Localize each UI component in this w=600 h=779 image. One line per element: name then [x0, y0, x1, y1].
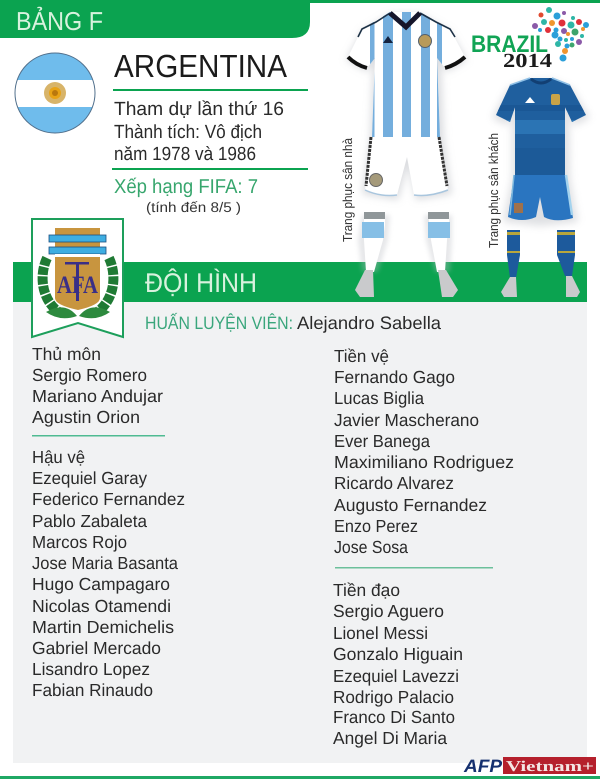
coach: HUẤN LUYỆN VIÊN:: [145, 312, 293, 333]
logo wordmark: BRAZIL: [471, 31, 548, 58]
squad list: midfielders: Maximiliano Rodriguez: [334, 452, 514, 472]
FIFA ranking: [114, 176, 258, 215]
squad list: forwards: Gonzalo Higuain: [333, 644, 463, 664]
icon: Argentina flag: [15, 53, 95, 134]
participation and achievements: Tham dự lần thứ 16: [114, 99, 284, 120]
squad list: midfielders: Augusto Fernandez: [334, 495, 487, 515]
squad list: midfielders: Lucas Biglia: [334, 388, 424, 408]
home shorts: [365, 137, 448, 195]
label: away kit: Trang phục sân khách: [486, 133, 501, 248]
squad list: midfielders: Jose Sosa: [334, 537, 408, 557]
away shirt: [490, 78, 590, 175]
FIFA ranking: Xếp hạng FIFA: 7: [114, 176, 258, 198]
squad list: forwards: Tiền đạo: [333, 580, 400, 600]
label: home kit: Trang phục sân nhà: [340, 137, 355, 242]
squad list: forwards: Franco Di Santo: [333, 707, 455, 727]
squad list: forwards: Lionel Messi: [333, 623, 428, 643]
squad list: forwards: Rodrigo Palacio: [333, 687, 454, 707]
squad heading: ĐỘI HÌNH: [145, 268, 257, 298]
squad list: defenders: [32, 447, 185, 700]
participation and achievements: [114, 99, 284, 165]
icon: AFA crest pennant: AFA: [57, 272, 98, 299]
squad list: defenders: Hậu vệ: [32, 447, 85, 467]
squad list: goalkeepers: Thủ môn: [32, 344, 101, 364]
country name: ARGENTINA: [114, 48, 288, 84]
squad list: defenders: Jose Maria Basanta: [32, 553, 178, 573]
logo year: 2014: [503, 50, 552, 72]
squad list: forwards: [333, 580, 463, 748]
squad list: defenders: Fabian Rinaudo: [32, 680, 153, 700]
squad list: defenders: Gabriel Mercado: [32, 638, 161, 658]
home socks and boots: [355, 211, 458, 297]
squad list: forwards: Angel Di Maria: [333, 728, 447, 748]
section band: squad: [13, 262, 587, 302]
squad list: midfielders: Javier Mascherano: [334, 410, 479, 430]
away shorts: [508, 175, 573, 220]
squad list: defenders: Federico Fernandez: [32, 489, 185, 509]
logo: Brazil 2014: [471, 7, 589, 72]
illustration: away kit: [490, 78, 590, 297]
AFP mark: AFP: [463, 756, 503, 776]
squad list: defenders: Nicolas Otamendi: [32, 596, 171, 616]
squad list: goalkeepers: Mariano Andujar: [32, 386, 163, 406]
squad list: midfielders: Enzo Perez: [334, 516, 418, 536]
squad list: goalkeepers: [32, 344, 163, 427]
squad list: defenders: Martin Demichelis: [32, 617, 174, 637]
squad list: forwards: Sergio Aguero: [333, 601, 444, 621]
squad list: forwards: Ezequiel Lavezzi: [333, 666, 459, 686]
participation and achievements: năm 1978 và 1986: [114, 144, 256, 165]
header band: group: [0, 0, 600, 38]
icon: AFA crest pennant: [32, 219, 123, 337]
squad list: defenders: Pablo Zabaleta: [32, 511, 147, 531]
squad list: midfielders: Ricardo Alvarez: [334, 473, 454, 493]
squad list: goalkeepers: Agustin Orion: [32, 407, 140, 427]
squad list: midfielders: Fernando Gago: [334, 367, 455, 387]
panel: squad background: [13, 302, 587, 763]
participation and achievements: Thành tích: Vô địch: [114, 122, 262, 143]
squad list: defenders: Hugo Campagaro: [32, 574, 170, 594]
logo dots: [532, 7, 589, 62]
home shirt: [348, 10, 465, 140]
squad list: midfielders: Ever Banega: [334, 431, 430, 451]
squad list: defenders: Marcos Rojo: [32, 532, 127, 552]
squad list: midfielders: [334, 346, 514, 557]
squad list: midfielders: Tiền vệ: [334, 346, 389, 366]
squad list: defenders: Lisandro Lopez: [32, 659, 150, 679]
logo: AFP Vietnam+: [463, 756, 596, 776]
squad list: defenders: Ezequiel Garay: [32, 468, 147, 488]
squad list: goalkeepers: Sergio Romero: [32, 365, 147, 385]
group title: BẢNG F: [16, 6, 103, 36]
coach: [145, 312, 442, 333]
FIFA ranking: (tính đến 8/5 ): [146, 199, 241, 215]
illustration: home kit: [346, 10, 467, 297]
coach: Alejandro Sabella: [297, 313, 442, 333]
away socks and boots: [501, 230, 580, 297]
Vietnam+ mark: Vietnam+: [506, 759, 594, 775]
